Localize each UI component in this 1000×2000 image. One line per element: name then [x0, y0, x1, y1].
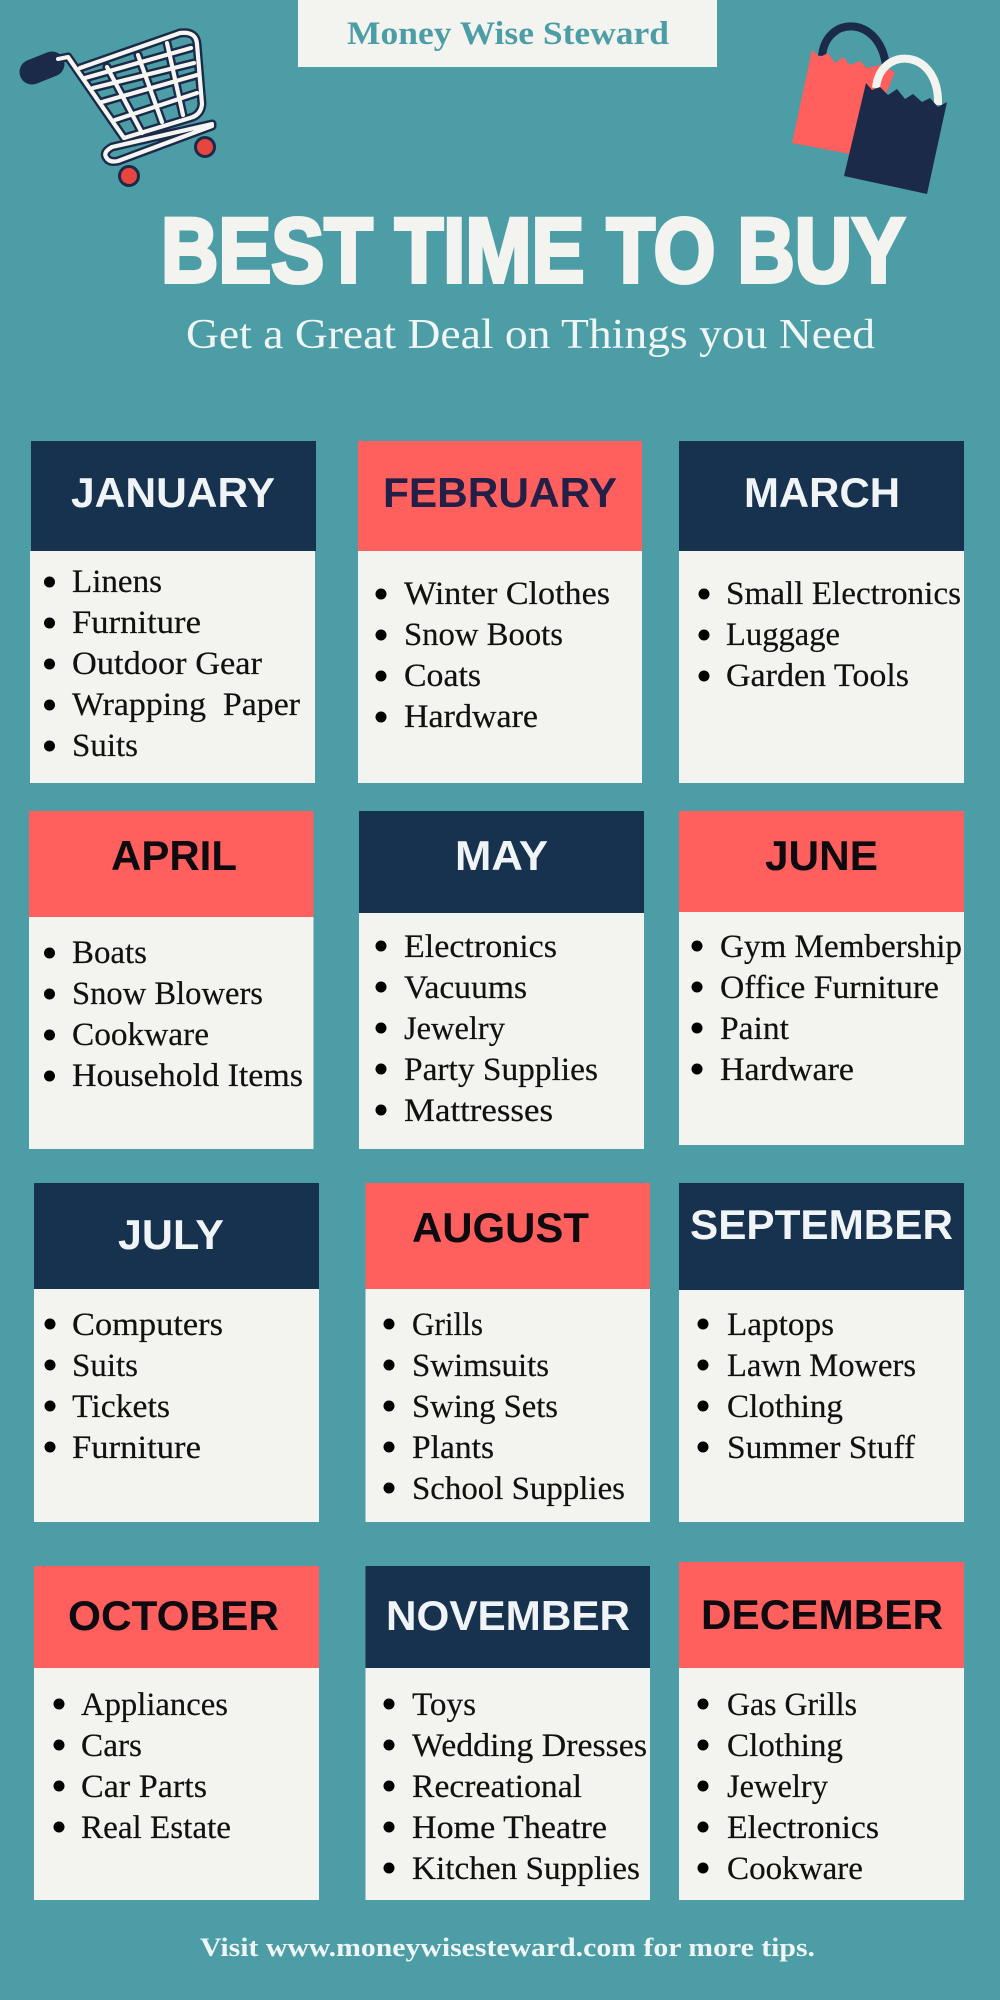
- item list: Vacuums: [404, 970, 527, 1006]
- month header: FEBRUARY: [383, 469, 617, 516]
- item list: School Supplies: [412, 1471, 625, 1507]
- item list: [698, 1687, 879, 1887]
- item list: Gas Grills: [727, 1687, 857, 1723]
- item list: Suits: [72, 728, 138, 764]
- icon: shopping cart: [32, 33, 214, 185]
- panel: November: [366, 1566, 650, 1900]
- body card: [29, 917, 314, 1149]
- panel: May: [359, 811, 644, 1149]
- item list: Swimsuits: [412, 1348, 549, 1384]
- item list: Laptops: [727, 1307, 834, 1343]
- item list: [384, 1307, 625, 1507]
- body card: [366, 1289, 650, 1522]
- item list: Toys: [412, 1687, 476, 1723]
- item list: [698, 576, 961, 694]
- body card: [359, 913, 644, 1149]
- item list: Car Parts: [81, 1769, 207, 1805]
- month header: DECEMBER: [701, 1591, 943, 1638]
- month header: OCTOBER: [68, 1592, 279, 1639]
- item list: [44, 564, 300, 764]
- item list: Furniture: [72, 1430, 201, 1466]
- item list: Home Theatre: [412, 1810, 607, 1846]
- item list: Computers: [72, 1307, 223, 1343]
- month header: [31, 441, 316, 551]
- item list: Boats: [72, 935, 147, 971]
- month header: JANUARY: [71, 469, 275, 516]
- item list: Kitchen Supplies: [412, 1851, 640, 1887]
- body card: [358, 551, 642, 783]
- panel: April: [29, 811, 314, 1149]
- item list: Gym Membership: [720, 929, 962, 965]
- item list: Snow Boots: [404, 617, 563, 653]
- panel: December: [679, 1562, 964, 1900]
- item list: [698, 1307, 916, 1466]
- item list: [384, 1687, 647, 1887]
- body card: [679, 1290, 964, 1522]
- panel: July: [34, 1183, 319, 1522]
- icon: shopping bags: [792, 26, 947, 194]
- month header: [679, 1562, 964, 1668]
- item list: Plants: [412, 1430, 494, 1466]
- item list: Office Furniture: [720, 970, 939, 1006]
- month header: NOVEMBER: [386, 1592, 630, 1639]
- item list: Furniture: [72, 605, 201, 641]
- item list: Party Supplies: [404, 1052, 598, 1088]
- panel: September: [679, 1183, 964, 1522]
- item list: Wedding Dresses: [412, 1728, 647, 1764]
- month header: MAY: [455, 832, 548, 879]
- item list: Real Estate: [81, 1810, 231, 1846]
- month header: MARCH: [744, 469, 900, 516]
- month header: [34, 1183, 319, 1289]
- item list: Suits: [72, 1348, 138, 1384]
- footer note: Visit www.moneywisesteward.com for more tips.: [200, 1933, 815, 1962]
- panel: August: [366, 1183, 650, 1522]
- body card: [30, 551, 315, 783]
- panel: October: [34, 1566, 319, 1900]
- panel: June: [679, 811, 964, 1145]
- item list: Tickets: [72, 1389, 170, 1425]
- item list: Appliances: [81, 1687, 228, 1723]
- title: BEST TIME TO BUY: [161, 200, 905, 302]
- body card: [679, 912, 964, 1145]
- month header: JULY: [118, 1211, 224, 1258]
- item list: Paint: [720, 1011, 789, 1047]
- month header: [679, 811, 964, 912]
- item list: Hardware: [404, 699, 538, 735]
- item list: Electronics: [727, 1810, 879, 1846]
- item list: Summer Stuff: [727, 1430, 915, 1466]
- item list: [44, 935, 303, 1094]
- item list: [44, 1307, 223, 1466]
- item list: Wrapping Paper: [72, 687, 300, 723]
- item list: Cookware: [727, 1851, 863, 1887]
- item list: [376, 929, 598, 1129]
- item list: [376, 576, 610, 735]
- item list: Clothing: [727, 1389, 843, 1425]
- item list: Clothing: [727, 1728, 843, 1764]
- panel: January: [30, 441, 316, 783]
- panel: February: [358, 441, 642, 783]
- month header: AUGUST: [412, 1204, 589, 1251]
- item list: Cookware: [72, 1017, 209, 1053]
- item list: Household Items: [72, 1058, 303, 1094]
- item list: Swing Sets: [412, 1389, 558, 1425]
- month header: [358, 441, 642, 551]
- month header: SEPTEMBER: [690, 1201, 953, 1248]
- brand banner: Money Wise Steward: [347, 16, 669, 52]
- item list: Grills: [412, 1307, 483, 1343]
- item list: Electronics: [404, 929, 557, 965]
- item list: Snow Blowers: [72, 976, 263, 1012]
- month header: [679, 1183, 964, 1290]
- item list: Small Electronics: [726, 576, 961, 612]
- month header: APRIL: [111, 832, 237, 879]
- month header: [366, 1183, 650, 1289]
- body card: [34, 1668, 319, 1900]
- month header: [34, 1566, 319, 1668]
- month header: [366, 1566, 650, 1668]
- item list: Lawn Mowers: [727, 1348, 916, 1384]
- month header: [359, 811, 644, 913]
- item list: Outdoor Gear: [72, 646, 262, 682]
- item list: Luggage: [726, 617, 840, 653]
- item list: Coats: [404, 658, 481, 694]
- month header: [29, 811, 314, 917]
- month header: [679, 441, 964, 551]
- month header: JUNE: [765, 832, 878, 879]
- panel: March: [679, 441, 964, 783]
- item list: Mattresses: [404, 1093, 553, 1129]
- item list: Linens: [72, 564, 162, 600]
- body card: [34, 1289, 319, 1522]
- brand banner: [298, 0, 717, 67]
- item list: Recreational: [412, 1769, 582, 1805]
- body card: [679, 1668, 964, 1900]
- item list: Jewelry: [404, 1011, 505, 1047]
- body card: [366, 1668, 650, 1900]
- item list: Cars: [81, 1728, 142, 1764]
- item list: [692, 929, 962, 1088]
- body card: [679, 551, 964, 783]
- item list: [54, 1687, 231, 1846]
- item list: Winter Clothes: [404, 576, 610, 612]
- subtitle: Get a Great Deal on Things you Need: [186, 312, 875, 358]
- item list: Garden Tools: [726, 658, 909, 694]
- item list: Hardware: [720, 1052, 854, 1088]
- item list: Jewelry: [727, 1769, 828, 1805]
